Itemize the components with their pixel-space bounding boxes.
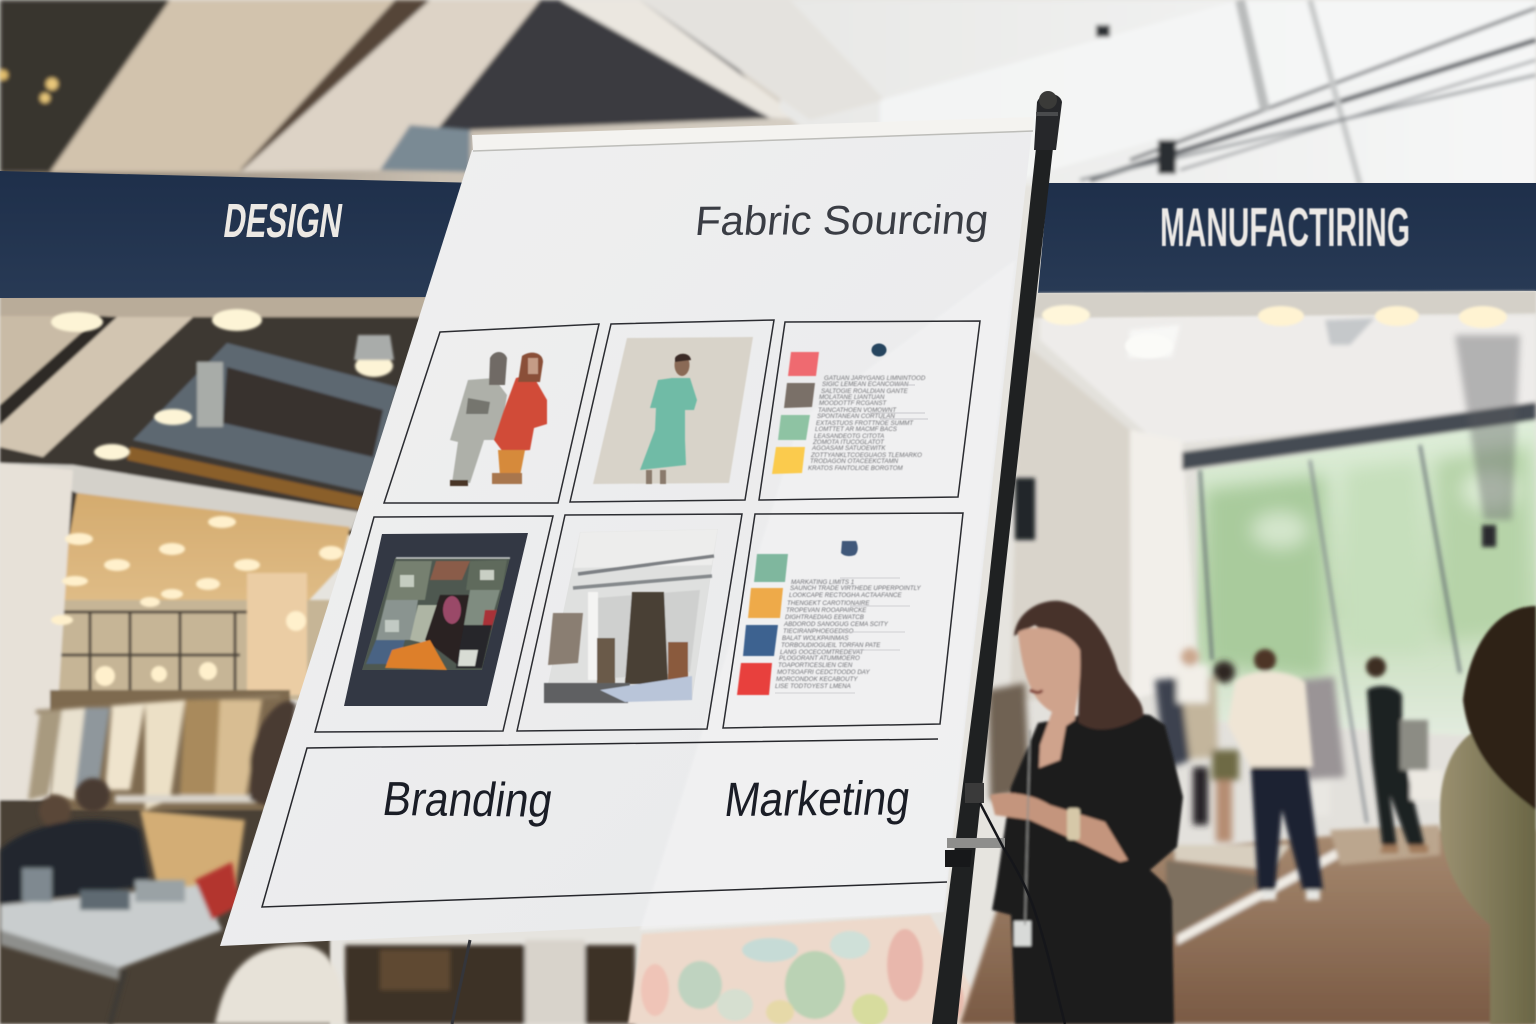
small caption text: LOOKCAPE RECTOGHA ACTAAFANCE <box>789 592 903 599</box>
window foliage <box>1205 445 1530 680</box>
small caption text: PLOGORANT ATUMMOERO <box>779 655 860 662</box>
small caption text: SAUNCH TRADE VIRTHEDE UPPERPOINTLY <box>790 585 922 592</box>
ceiling lamps right <box>1042 305 1507 358</box>
cable <box>980 803 1065 1024</box>
small caption text: TRODAGON OTACEEKCTAMN <box>810 458 899 465</box>
small caption text: ABDOROD SANOGUG CEMA SCITY <box>783 621 889 628</box>
small caption text: LOMTTET AR MACMF BACS <box>815 426 898 433</box>
small caption text: GATUAN JARYGANG LIMNINTOOD <box>824 375 926 382</box>
small caption text: SIGIC LEMEAN ECANCOWAN <box>822 381 909 388</box>
figure: model in red dress <box>492 353 547 484</box>
swatches <box>737 541 858 695</box>
banner: design <box>0 171 480 298</box>
cell: gallery photo <box>517 514 742 731</box>
heading: Fabric Sourcing: Fabric Sourcing <box>693 197 991 244</box>
small caption text: TROPEVAN ROOAPAIRCKE <box>786 607 867 614</box>
small caption text: LISE TODTOYEST LMENA <box>775 683 851 690</box>
clothes rack <box>28 696 296 900</box>
top roller <box>472 117 1034 151</box>
banner label: DESIGN: DESIGN <box>220 194 346 248</box>
small caption text: THENGEKT CAROTIONAIRE <box>787 600 870 607</box>
floor <box>960 825 1536 1024</box>
small caption text <box>808 375 926 472</box>
man in white shirt <box>1228 649 1323 900</box>
cell: colour palette one <box>759 321 980 500</box>
small caption text: SALTOGIE ROALDIAN GANTE <box>821 388 909 395</box>
banner: manufacturing <box>1030 183 1536 318</box>
lower hall left: ceiling structure <box>0 295 460 1024</box>
hair <box>1014 601 1143 730</box>
small caption text: KRATOS FANTOLIOE BORGTOM <box>808 465 904 472</box>
small caption text: LEASANDEOTG CITOTA <box>814 433 884 440</box>
mosaic details <box>366 558 510 670</box>
cell: colour palette two <box>723 513 963 728</box>
man in black <box>1366 657 1442 853</box>
person in olive coat with curly hair <box>1440 606 1536 1024</box>
board sheet <box>220 130 1032 946</box>
small caption text: MOLATANE LIANTUAN <box>819 394 885 401</box>
small caption text: LANG OOCECOMTREDEVAT <box>780 649 865 656</box>
cell: dark mosaic photo <box>315 516 553 732</box>
watch <box>1067 808 1080 840</box>
cell: model in teal dress <box>570 320 774 502</box>
skirt on mannequin <box>628 915 992 1024</box>
figure: model in grey <box>450 352 507 486</box>
forearm <box>990 793 1128 862</box>
cell: branding and marketing strip <box>262 739 947 907</box>
small caption text: MOODOTTF RCGANST <box>819 400 887 407</box>
seated people and table <box>0 778 635 1024</box>
small caption text: MOTSOAFRI CEDCTOODO DAY <box>777 669 870 676</box>
face and chest <box>1018 628 1080 768</box>
label: Marketing: Marketing <box>722 772 914 827</box>
small caption text: TORBOUDIOGUEIL TORFAN PATE <box>781 642 881 649</box>
small caption text: DIGHTRAEDIAG EEWATCB <box>785 614 864 621</box>
small caption text: AGOASAM SATUOEWITK <box>811 445 886 452</box>
clamp on pole <box>965 783 984 803</box>
cell: two models <box>384 324 599 503</box>
easel pole and clamp <box>452 91 1065 1024</box>
poster board <box>220 117 1034 946</box>
small caption text: ZOMOTA ITUCOGLATOT <box>812 439 885 446</box>
ceiling lamps left <box>51 309 394 686</box>
small caption text: MARKATING LIMITS 1 <box>791 579 854 586</box>
background crowd <box>988 648 1345 842</box>
lanyard tag <box>1014 921 1031 946</box>
small caption text: SPONTANEAN CORTULAN <box>817 413 895 420</box>
right hall: walls and window <box>1010 290 1536 850</box>
small caption text <box>775 579 922 690</box>
swatches <box>772 344 886 474</box>
small caption text: EXTASTUOS FROTTNOE SUMMT <box>816 420 914 427</box>
small caption text: MORCONDOK KECABOUTY <box>776 676 858 683</box>
small caption text: ZOTTYANKLTCOEGUAOS TLEMARKO <box>810 452 922 459</box>
woman in black <box>990 601 1183 1024</box>
small caption text: TIECIRANPHOEGEDISO <box>783 628 854 635</box>
small caption text: TAINCATHOEN VOMOWNT <box>818 407 897 414</box>
label: Branding: Branding <box>379 772 556 828</box>
small caption text: TOAPORTICESLIEN CIEN <box>778 662 853 669</box>
small caption text: BALAT WOLKPAINMAS <box>782 635 849 642</box>
jacket and trousers <box>992 710 1183 1024</box>
